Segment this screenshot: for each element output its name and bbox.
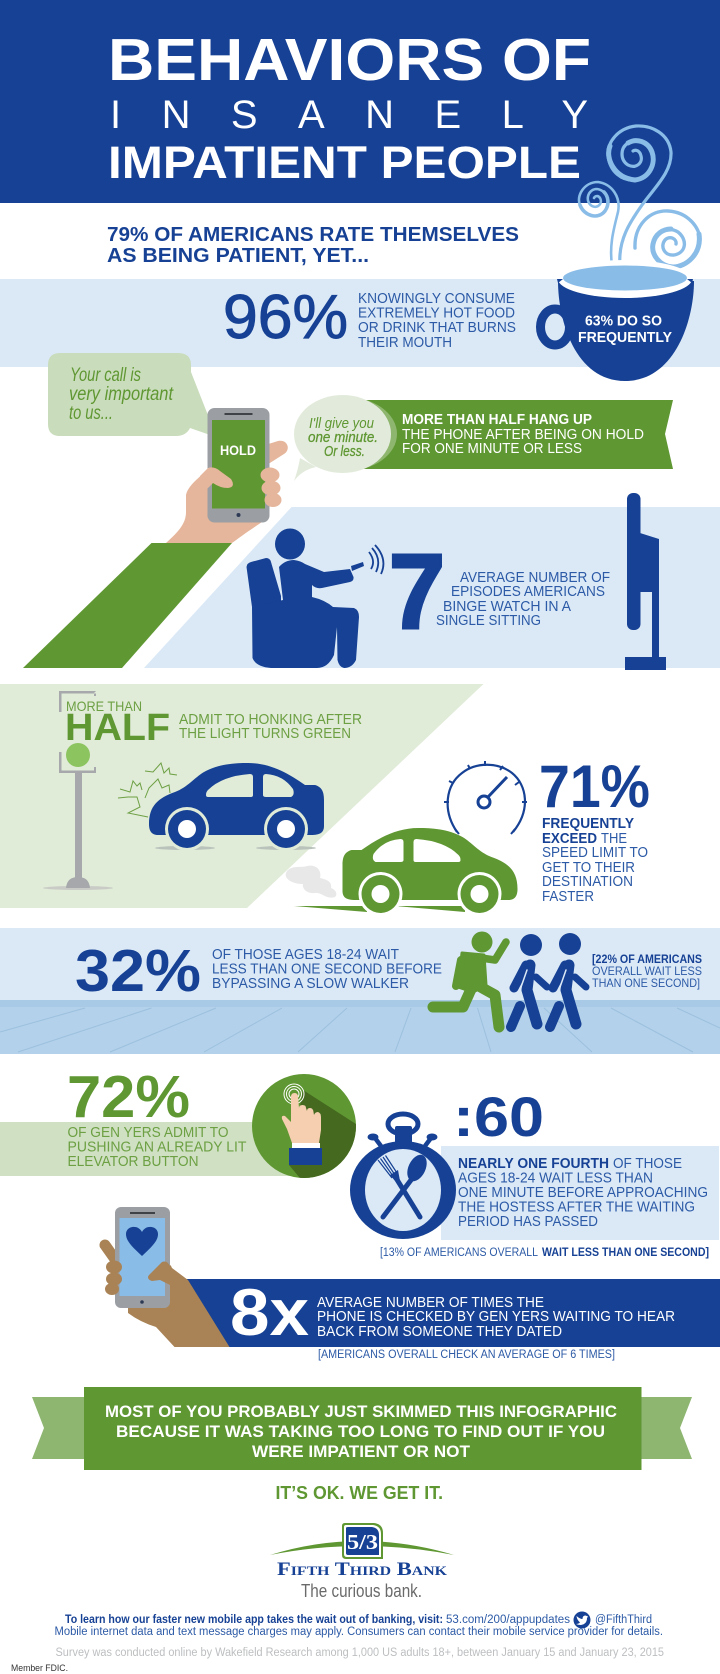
- restaurant description: NEARLY ONE FOURTH: [458, 1156, 609, 1172]
- footer: member FDIC: Member FDIC.: [11, 1663, 68, 1674]
- speech bubble: your call is important: [48, 353, 213, 436]
- icon: walker two: [550, 933, 586, 1027]
- hot food description: [358, 291, 516, 351]
- dating description: BACK FROM SOMEONE THEY DATED: [317, 1324, 562, 1340]
- speeding description: FREQUENTLY: [542, 816, 634, 832]
- speeding description: DESTINATION: [542, 874, 633, 890]
- speech bubble: one minute: I'll give you: [309, 415, 375, 432]
- restaurant description: [458, 1156, 708, 1230]
- title: IMPATIENT PEOPLE: [108, 137, 581, 188]
- icon: traffic light: [43, 691, 113, 890]
- note: 13% of Americans: [380, 1247, 709, 1259]
- cup label: FREQUENTLY: [578, 330, 672, 346]
- elevator description: [68, 1125, 247, 1170]
- logo: Fifth Third Bank: The curious bank.: [301, 1581, 422, 1601]
- elevator description: OF GEN YERS ADMIT TO: [68, 1125, 228, 1141]
- stat 7: 7: [389, 533, 445, 651]
- footer: call to action: To learn how our faster new mobile app takes the wait out of banking, visit:: [65, 1614, 443, 1626]
- footer: call to action: @FifthThird: [595, 1614, 652, 1626]
- ribbon: closing message: WERE IMPATIENT OR NOT: [252, 1443, 470, 1461]
- footer: call to action: Mobile internet data and text message charges may apply. Consumers can contact their mobile service provider for details.: [54, 1626, 663, 1638]
- title: [108, 27, 591, 188]
- icon: twitter: [574, 1612, 590, 1628]
- stat 71%: 71%: [539, 753, 650, 820]
- cup label: [578, 314, 672, 346]
- icon: blue car: [149, 763, 324, 851]
- footer: call to action: 53.com/200/appupdates: [446, 1614, 570, 1626]
- hang up text: FOR ONE MINUTE OR LESS: [402, 441, 582, 457]
- footer: survey note: Survey was conducted online by Wakefield Research among 1,000 US adults 18+, between January 15 and January 23, 2015: [56, 1647, 664, 1659]
- speech bubble: one minute: one minute.: [308, 429, 378, 446]
- banner: hang up stat: [294, 395, 673, 481]
- icon: television: [625, 493, 666, 670]
- icon: honk burst: [118, 763, 177, 817]
- speeding description: THE: [601, 831, 627, 847]
- icon: person in armchair with remote: [246, 528, 383, 668]
- restaurant description: PERIOD HAS PASSED: [458, 1214, 598, 1230]
- ribbon: closing message: [32, 1387, 692, 1470]
- note: 22% of Americans: OVERALL WAIT LESS: [592, 964, 702, 978]
- cup label: 63% DO SO: [585, 314, 662, 330]
- hot food description: EXTREMELY HOT FOOD: [358, 306, 515, 322]
- subtitle: [107, 224, 519, 267]
- icon: coffee cup: [540, 260, 694, 381]
- panel: binge watching: [144, 493, 720, 670]
- speech bubble: your call is important: to us...: [69, 403, 113, 424]
- note: 22% of Americans: THAN ONE SECOND]: [592, 976, 700, 990]
- binge description: AVERAGE NUMBER OF: [460, 570, 610, 586]
- speech bubble: one minute: Or less.: [324, 443, 365, 460]
- ribbon: closing message: BECAUSE IT WAS TAKING TOO LONG TO FIND OUT IF YOU: [116, 1423, 605, 1441]
- footer: call to action: [54, 1612, 663, 1638]
- phone: HOLD: [220, 443, 256, 458]
- walker description: LESS THAN ONE SECOND BEFORE: [212, 962, 442, 978]
- binge description: SINGLE SITTING: [436, 613, 541, 629]
- honking description: [179, 712, 362, 742]
- icon: stopwatch with fork and spoon: [350, 1114, 456, 1239]
- binge description: EPISODES AMERICANS: [451, 584, 605, 600]
- phone: [208, 408, 270, 522]
- stat 32%: 32%: [75, 938, 201, 1004]
- hang up text: THE PHONE AFTER BEING ON HOLD: [402, 427, 644, 443]
- elevator description: PUSHING AN ALREADY LIT: [68, 1140, 247, 1156]
- speech bubble: your call is important: Your call is: [70, 365, 141, 386]
- sleeve: [23, 543, 232, 668]
- more than half text: MORE THAN: [66, 698, 142, 714]
- speeding description: SPEED LIMIT TO: [542, 845, 648, 861]
- icon: steam swirls: [579, 126, 700, 267]
- stat 96%: 96%: [223, 283, 348, 352]
- title: BEHAVIORS OF: [108, 27, 591, 93]
- icon: runner: [433, 932, 506, 1027]
- elevator description: ELEVATOR BUTTON: [68, 1154, 198, 1170]
- restaurant description: OF THOSE: [613, 1156, 682, 1172]
- restaurant description: ONE MINUTE BEFORE APPROACHING: [458, 1185, 708, 1201]
- panel: dating phone checks: [105, 1207, 720, 1349]
- logo: Fifth Third Bank: [270, 1523, 454, 1601]
- header banner: [0, 0, 720, 203]
- restaurant description: AGES 18-24 WAIT LESS THAN: [458, 1170, 653, 1186]
- hot food description: OR DRINK THAT BURNS: [358, 320, 516, 336]
- note: 22% of Americans: [22% OF AMERICANS: [592, 952, 702, 966]
- speeding description: EXCEED: [542, 831, 597, 847]
- note: 13% of Americans: [13% OF AMERICANS OVERALL: [380, 1247, 539, 1259]
- honking description: ADMIT TO HONKING AFTER: [179, 712, 362, 728]
- subtitle: AS BEING PATIENT, YET...: [107, 245, 369, 267]
- stat :60: :60: [453, 1085, 544, 1148]
- hang up text: [402, 412, 644, 457]
- walker description: [212, 947, 442, 992]
- panel: elevator button: [0, 1074, 356, 1178]
- tagline: IT’S OK. WE GET IT.: [276, 1482, 443, 1503]
- icon: walker one: [511, 934, 547, 1027]
- more than half text: HALF: [65, 707, 170, 749]
- logo: Fifth Third Bank: 5/3: [347, 1530, 378, 1554]
- panel: restaurant wait: [350, 1085, 719, 1240]
- icon: arm and hand holding phone: [23, 408, 288, 668]
- speeding description: [542, 816, 648, 905]
- speech bubble: your call is important: very important: [69, 384, 174, 405]
- walker description: OF THOSE AGES 18-24 WAIT: [212, 947, 399, 963]
- icon: finger pushing button: [252, 1074, 356, 1178]
- logo: Fifth Third Bank: Fifth Third Bank: [277, 1560, 448, 1580]
- speech bubble: one minute: [294, 395, 391, 481]
- ribbon: closing message: MOST OF YOU PROBABLY JUST SKIMMED THIS INFOGRAPHIC: [105, 1403, 617, 1421]
- speeding description: FASTER: [542, 889, 594, 905]
- stat 8x: 8x: [230, 1275, 309, 1349]
- panel: hot food stat: [0, 279, 720, 367]
- icon: speedometer: [444, 761, 527, 834]
- binge description: [436, 570, 610, 629]
- note: Americans overall: [AMERICANS OVERALL CHECK AN AVERAGE OF 6 TIMES]: [318, 1349, 615, 1361]
- hot food description: KNOWINGLY CONSUME: [358, 291, 515, 307]
- icon: speeding green car: [286, 828, 518, 916]
- speeding description: GET TO THEIR: [542, 860, 635, 876]
- binge description: BINGE WATCH IN A: [443, 599, 571, 615]
- restaurant description: THE HOSTESS AFTER THE WAITING: [458, 1200, 695, 1216]
- panel: slow walker: [0, 928, 720, 1054]
- hang up text: MORE THAN HALF HANG UP: [402, 412, 592, 428]
- icon: hand holding phone with heart: [105, 1207, 230, 1347]
- note: 13% of Americans: WAIT LESS THAN ONE SECOND]: [542, 1247, 709, 1259]
- note: 22% of Americans: [592, 952, 702, 990]
- stat 72%: 72%: [67, 1064, 190, 1130]
- dating description: AVERAGE NUMBER OF TIMES THE: [317, 1295, 544, 1311]
- dating description: [317, 1295, 675, 1340]
- title: INSANELY: [110, 93, 588, 137]
- hot food description: THEIR MOUTH: [358, 335, 452, 351]
- honking description: THE LIGHT TURNS GREEN: [179, 726, 351, 742]
- subtitle: 79% OF AMERICANS RATE THEMSELVES: [107, 224, 519, 246]
- panel: honking: [0, 684, 484, 908]
- walker description: BYPASSING A SLOW WALKER: [212, 976, 409, 992]
- dating description: PHONE IS CHECKED BY GEN YERS WAITING TO HEAR: [317, 1309, 675, 1325]
